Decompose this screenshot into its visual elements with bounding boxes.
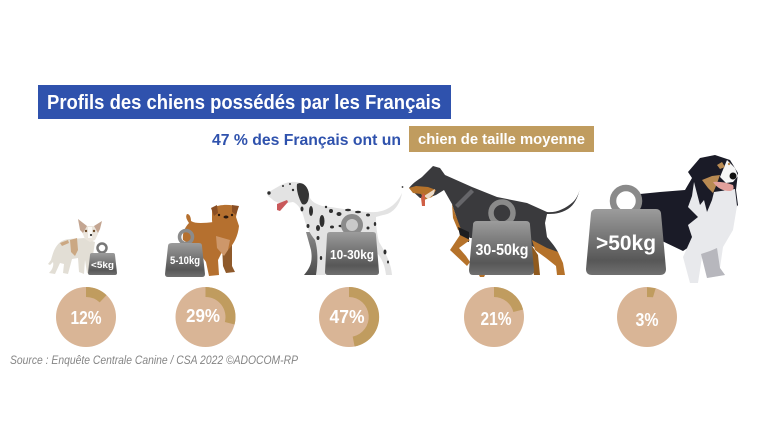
subtitle: chien de taille moyenne bbox=[418, 131, 585, 148]
title banner bbox=[38, 85, 451, 119]
icon: dalmatian bbox=[267, 182, 403, 275]
subtitle bbox=[212, 126, 594, 152]
title banner: Profils des chiens possédés par les Français bbox=[47, 91, 441, 114]
donut: 3%: 3% bbox=[636, 310, 658, 330]
donut: 47%: 47% bbox=[330, 307, 364, 327]
icon: weight under 5kg: <5kg bbox=[91, 260, 114, 271]
icon: weight over 50kg bbox=[586, 188, 666, 275]
donut: 29% bbox=[176, 287, 236, 347]
source note: Source : Enquête Centrale Canine / CSA 2022 ©ADOCOM-RP bbox=[10, 355, 298, 367]
dog group: over 50kg bbox=[586, 155, 738, 283]
icon: weight over 50kg: >50kg bbox=[596, 232, 656, 255]
icon: weight 5-10kg: 5-10kg bbox=[170, 255, 200, 267]
donut: 3% bbox=[617, 287, 677, 347]
dog group: 5-10kg bbox=[165, 205, 239, 277]
icon: australian shepherd bbox=[640, 155, 738, 283]
icon: chihuahua bbox=[48, 219, 102, 274]
donut: 21%: 21% bbox=[480, 309, 512, 329]
icon: griffon bbox=[183, 205, 239, 276]
donut: 12% bbox=[56, 287, 116, 347]
icon: weight 30-50kg bbox=[469, 202, 534, 275]
subtitle: 47 % des Français ont un bbox=[212, 132, 401, 149]
icon: doberman bbox=[409, 166, 580, 277]
donut: 21% bbox=[464, 287, 524, 347]
donut: 29%: 29% bbox=[186, 306, 220, 326]
dog group: 30-50kg bbox=[409, 166, 580, 277]
donut: 12%: 12% bbox=[70, 308, 102, 328]
icon: weight 30-50kg: 30-50kg bbox=[476, 242, 528, 259]
dog group: 10-30kg bbox=[267, 182, 403, 275]
dog group: under 5kg bbox=[48, 219, 117, 275]
icon: weight 10-30kg: 10-30kg bbox=[330, 247, 374, 262]
donut: 47% bbox=[319, 287, 379, 347]
